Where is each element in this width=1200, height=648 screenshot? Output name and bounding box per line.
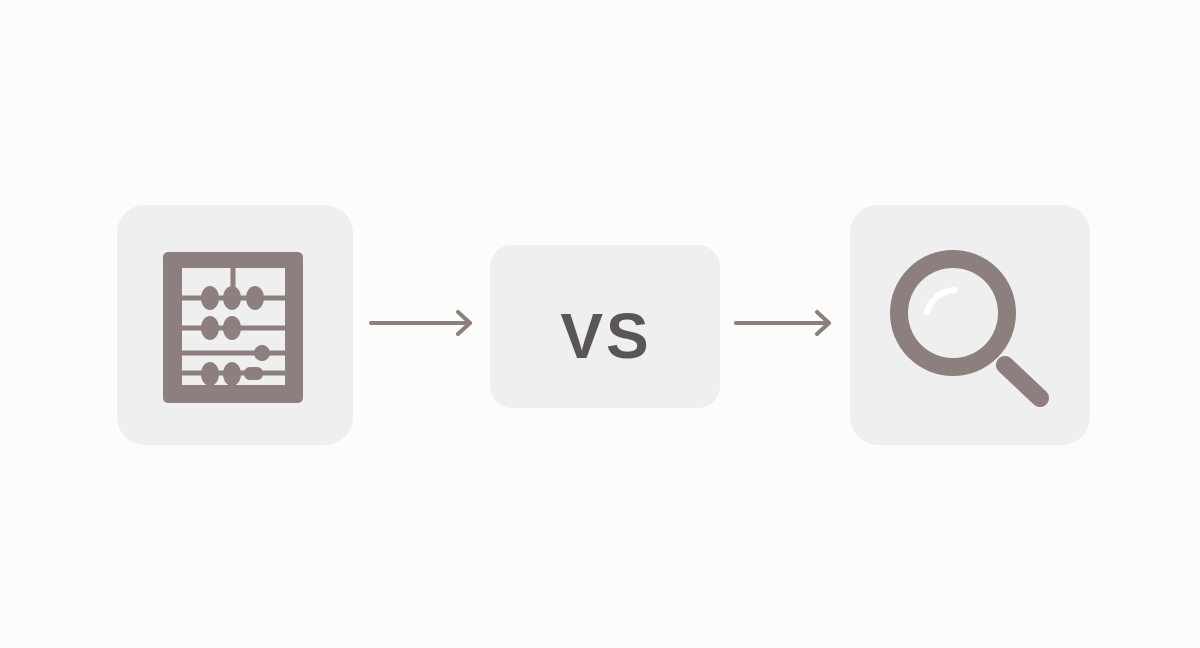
icon: abacus (163, 252, 303, 403)
icon: magnifying glass (890, 250, 1049, 407)
arrow: vs to search (734, 310, 832, 336)
panel: magnifier (850, 205, 1090, 445)
text: vs: VS (560, 300, 652, 372)
panel: abacus (117, 205, 353, 445)
arrow: abacus to vs (369, 310, 472, 336)
panel: vs (490, 245, 720, 408)
